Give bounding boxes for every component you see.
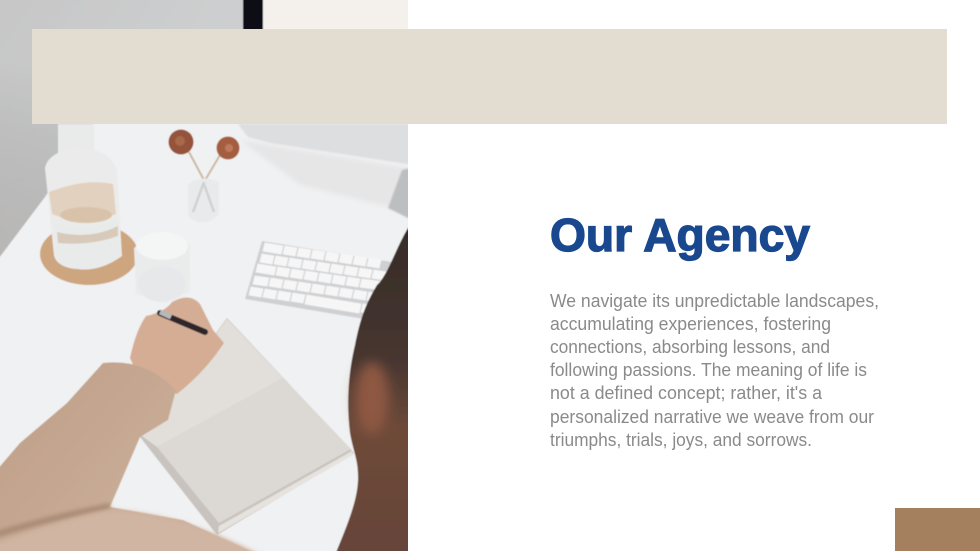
wall background (0, 0, 244, 257)
photo: desk scene (0, 0, 423, 551)
body text: triumphs, trials, joys, and sorrows. (550, 430, 812, 450)
icon: flowers in vase (168, 130, 240, 223)
header band (32, 29, 947, 124)
body text (550, 291, 879, 450)
bright panel (262, 0, 408, 29)
icon: keyboard (245, 241, 392, 323)
monitor base (239, 124, 408, 219)
person head (336, 227, 408, 551)
corner accent block (895, 508, 980, 551)
title: Our Agency (550, 209, 810, 261)
dark monitor edge (243, 0, 263, 32)
body text: connections, absorbing lessons, and (550, 337, 830, 357)
body text: accumulating experiences, fostering (550, 314, 831, 334)
icon: glass (133, 245, 186, 302)
body text: personalized narrative we weave from our (550, 407, 874, 427)
body text: We navigate its unpredictable landscapes, (550, 291, 879, 311)
icon: coaster (40, 230, 136, 286)
white desk (0, 120, 420, 551)
hand (130, 297, 224, 394)
icon: notebook (140, 318, 354, 535)
body text: following passions. The meaning of life is (550, 360, 867, 380)
arm and sweater (0, 362, 270, 551)
icon: water bottle (45, 124, 122, 269)
body text: not a defined concept; rather, it's a (550, 383, 823, 403)
